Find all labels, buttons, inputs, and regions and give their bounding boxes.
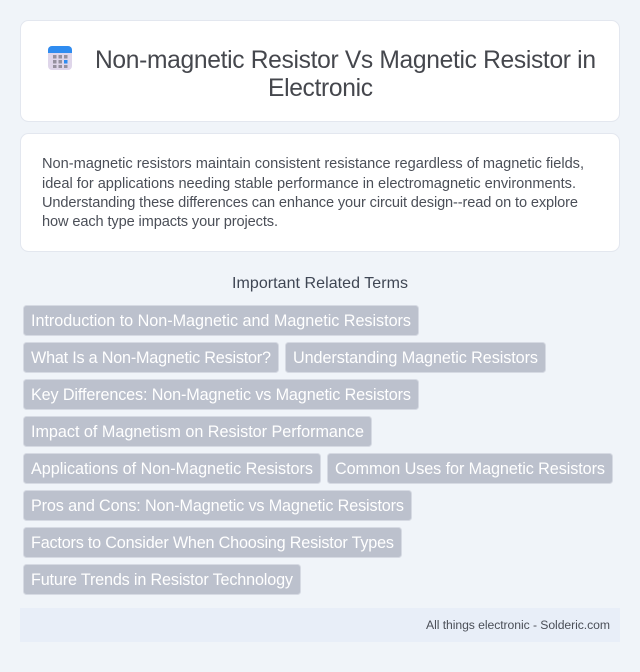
tag: what is a non-magnetic resistor: What Is a Non-Magnetic Resistor? bbox=[31, 349, 271, 367]
tag: pros and cons bbox=[24, 490, 412, 520]
tag: pros and cons: Pros and Cons: Non-Magnetic vs Magnetic Resistors bbox=[31, 497, 404, 515]
panel: description card: how each type impacts your projects. bbox=[42, 214, 278, 230]
panel: header card bbox=[20, 20, 620, 122]
panel: description card: Non-magnetic resistors maintain consistent resistance regardless of magnetic fields, bbox=[42, 156, 584, 172]
panel: description card: Understanding these differences can enhance your circuit design--read on to explore bbox=[42, 195, 578, 211]
tag: applications bbox=[24, 454, 320, 484]
footer: All things electronic - Solderic.com bbox=[426, 618, 610, 632]
heading: important related terms: Important Related Terms bbox=[232, 275, 408, 292]
panel: description card bbox=[20, 134, 620, 252]
tag: introduction bbox=[24, 306, 418, 336]
tag: common uses bbox=[328, 454, 612, 484]
tag: introduction: Introduction to Non-Magnetic and Magnetic Resistors bbox=[31, 312, 411, 330]
footer bbox=[20, 608, 620, 642]
tag: factors to consider: Factors to Consider When Choosing Resistor Types bbox=[31, 534, 394, 552]
tag: factors to consider bbox=[24, 528, 402, 558]
tag: understanding magnetic resistors: Understanding Magnetic Resistors bbox=[293, 349, 538, 367]
panel: description card: ideal for applications needing stable performance in electromagnetic environments. bbox=[42, 176, 576, 192]
tag: key differences: Key Differences: Non-Magnetic vs Magnetic Resistors bbox=[31, 386, 411, 404]
tag: impact of magnetism bbox=[24, 416, 372, 446]
tag: understanding magnetic resistors bbox=[286, 342, 546, 372]
tag: key differences bbox=[24, 380, 418, 410]
tag: future trends bbox=[24, 564, 300, 594]
tag: common uses: Common Uses for Magnetic Resistors bbox=[335, 460, 605, 478]
title bbox=[95, 47, 596, 102]
tag: what is a non-magnetic resistor bbox=[24, 342, 278, 372]
title: Non-magnetic Resistor Vs Magnetic Resistor in bbox=[95, 47, 596, 74]
tag: future trends: Future Trends in Resistor Technology bbox=[31, 571, 294, 589]
icon: calendar bbox=[48, 46, 72, 70]
tag: applications: Applications of Non-Magnetic Resistors bbox=[31, 460, 313, 478]
title: Electronic bbox=[268, 75, 373, 102]
tag: impact of magnetism: Impact of Magnetism on Resistor Performance bbox=[31, 423, 364, 441]
panel: related terms tags bbox=[24, 306, 612, 594]
